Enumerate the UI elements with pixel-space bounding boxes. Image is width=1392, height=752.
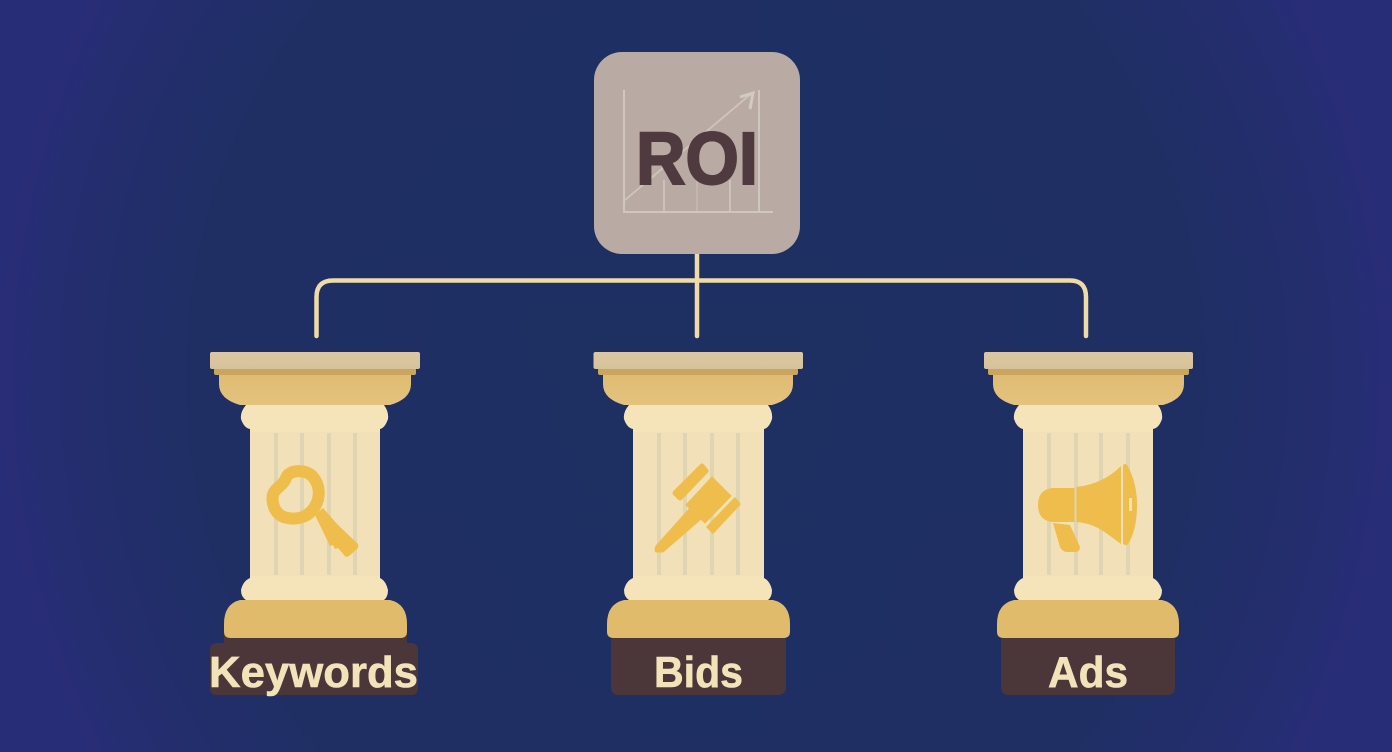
capital [219, 373, 411, 405]
pillar shaft [250, 405, 380, 578]
label plate [611, 634, 786, 695]
pillar: Keywords [209, 352, 420, 697]
label plate [210, 634, 418, 695]
icon: megaphone [1038, 464, 1137, 552]
label: Ads: Ads [1048, 648, 1128, 697]
label plate [1001, 634, 1175, 695]
neck top and bottom [624, 405, 772, 600]
pillar shaft [1023, 405, 1153, 578]
ROI box [594, 52, 800, 254]
pillar: Bids [594, 352, 803, 697]
connector lines [316, 254, 1086, 336]
flutes [657, 433, 740, 575]
label: Keywords: Keywords [209, 648, 418, 697]
base [997, 600, 1179, 638]
icon: gavel [655, 466, 739, 552]
base [224, 600, 407, 638]
ROI text: ROI [636, 117, 758, 200]
growth chart [624, 90, 773, 212]
pillar shaft [633, 405, 764, 578]
neck top and bottom [241, 405, 388, 600]
icon: key [272, 471, 358, 557]
flutes [274, 433, 357, 575]
flutes [1047, 433, 1130, 575]
label: Bids: Bids [654, 648, 743, 697]
capital [993, 373, 1184, 405]
pillar: Ads [984, 352, 1193, 697]
base [607, 600, 790, 638]
capital [603, 373, 793, 405]
neck top and bottom [1014, 405, 1162, 600]
